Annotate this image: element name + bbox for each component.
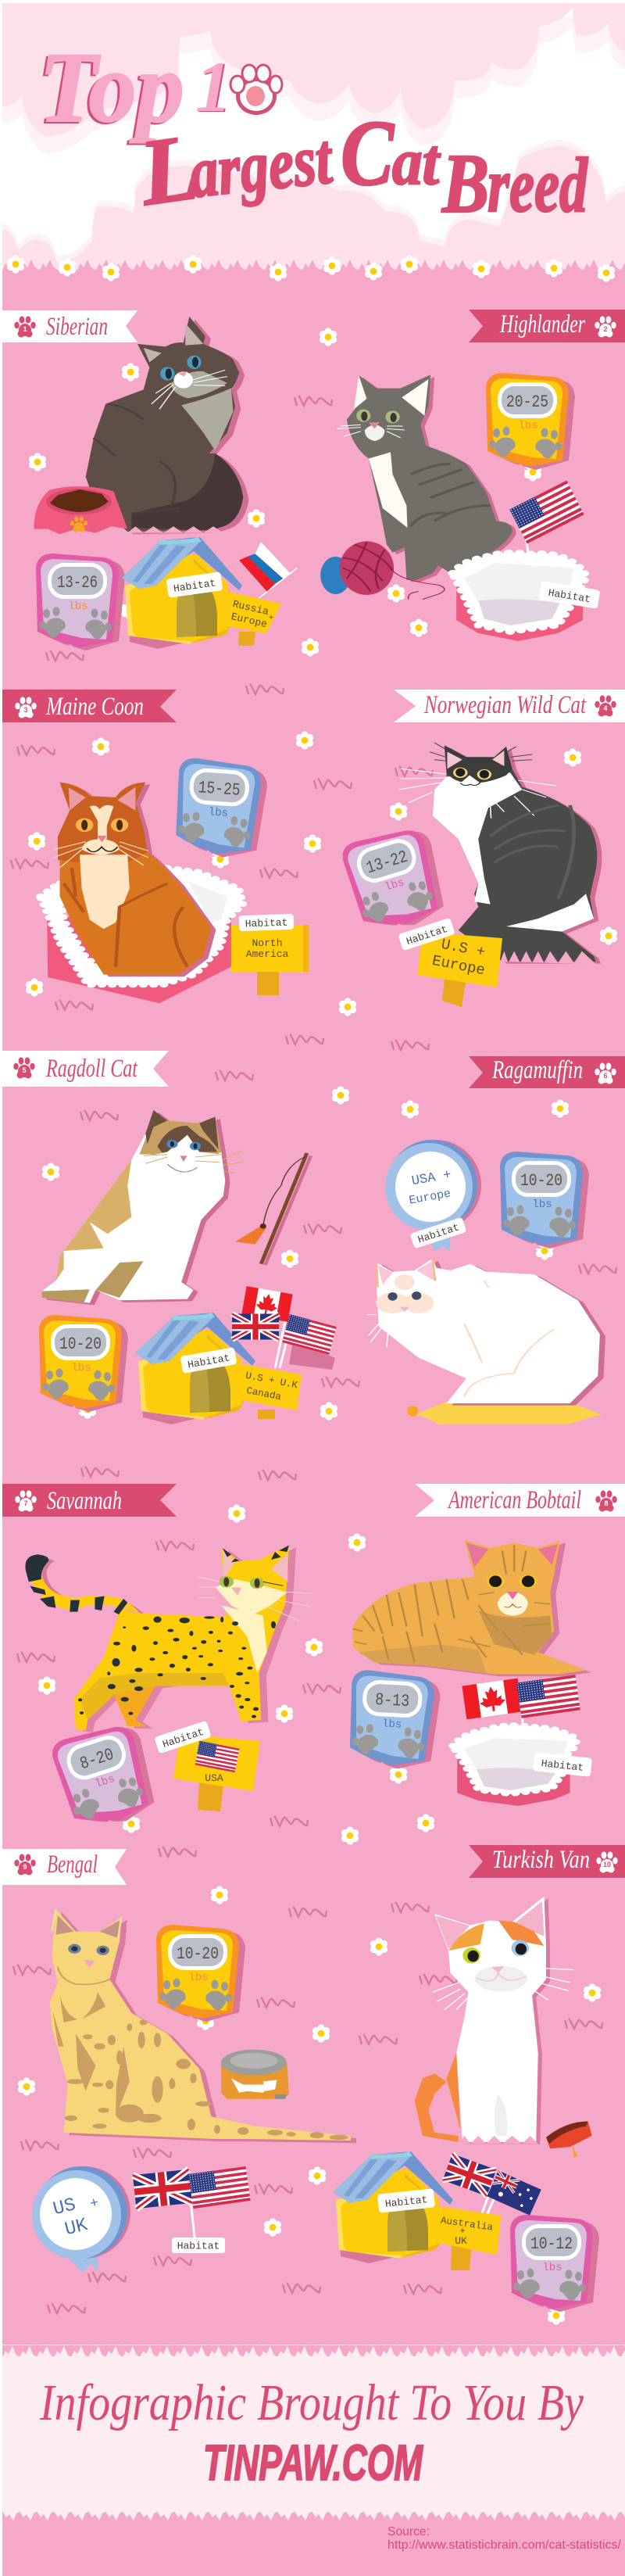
source note (388, 2525, 622, 2552)
cat: American Bobtail (353, 1540, 591, 1676)
flag: Russia (239, 542, 297, 598)
label: Habitat: Habitat (245, 917, 288, 930)
panel: header sky with clouds (2, 3, 625, 278)
weight scale: Ragdoll 10-20 lbs: 10-20 (59, 1335, 102, 1354)
label: Habitat: Habitat (384, 2194, 428, 2210)
ribbon badge: US + UK: + (88, 2195, 101, 2212)
weight scale: Ragdoll 10-20 lbs: lbs (71, 1362, 91, 1374)
sign: North America (231, 925, 309, 995)
weight scale: American Bobtail 8-13 lbs: 8-13 (375, 1690, 410, 1711)
cat: Highlander (337, 374, 516, 582)
house: Ragdoll habitat (135, 1313, 255, 1424)
banner: 5 Ragdoll Cat: 5 (22, 1066, 27, 1074)
title: argest (185, 118, 337, 213)
bed: Highlander habitat (452, 553, 586, 641)
banner: 4 Norwegian Wild Cat: 4 (603, 704, 608, 712)
weight scale: Bengal 10-20 lbs: 10-20 (177, 1944, 219, 1964)
weight scale: Savannah 8-20 lbs: lbs (94, 1773, 116, 1791)
sign: Australia + UK: + (459, 2226, 466, 2237)
sign: U.S + Europe: U.S + (440, 936, 487, 961)
weight scale: Norwegian Wild Cat 13-22 lbs (338, 821, 452, 940)
weight scale: Bengal 10-20 lbs (155, 1925, 245, 2022)
banner: 1 Siberian: 1 (23, 325, 27, 333)
title: B (441, 138, 489, 231)
cat: Savannah (25, 1546, 311, 1732)
sign: Russia + Europe: Europe (230, 611, 268, 630)
weight scale: Ragamuffin 10-20 lbs: lbs (532, 1198, 552, 1211)
flag: USA (509, 480, 584, 557)
banner: 10 Turkish Van (469, 1845, 625, 1878)
grass tufts (11, 396, 616, 2313)
title: Top (37, 34, 182, 145)
cat: Norwegian Wild Cat (398, 743, 602, 964)
weight scale: Savannah 8-20 lbs: 8-20 (77, 1745, 116, 1774)
cat collar (546, 2122, 592, 2158)
cat: Ragdoll (42, 1110, 243, 1305)
label: Habitat (172, 2237, 225, 2253)
label: Habitat (180, 1347, 237, 1374)
banner: 3 Maine Coon (2, 690, 177, 722)
ribbon badge: US + UK (32, 2166, 130, 2273)
sign: Australia + UK (434, 2206, 501, 2270)
title: 1 (195, 47, 231, 127)
title: C (341, 101, 395, 205)
panel: footer band (2, 2345, 625, 2520)
banner: 1 Siberian (2, 310, 138, 342)
sign: U.S + Europe (417, 932, 502, 1007)
banner: 7 Savannah (2, 1484, 177, 1517)
sign: North America: America (246, 948, 289, 960)
title (37, 32, 588, 231)
banner: 3 Maine Coon: 3 (23, 706, 28, 714)
label: Habitat (377, 2188, 435, 2213)
banner: 5 Ragdoll Cat (2, 1051, 169, 1087)
flowers scattered across the page (7, 255, 617, 2325)
cat food can (221, 2050, 289, 2099)
banner: 9 Bengal: Bengal (47, 1850, 98, 1879)
sign: USA: USA (205, 1772, 223, 1784)
cat: Ragamuffin (366, 1259, 605, 1406)
label: Habitat (398, 918, 455, 951)
flag: Australia (487, 2170, 541, 2216)
bed: American Bobtail habitat (452, 1725, 577, 1806)
banner: 9 Bengal: 9 (23, 1863, 27, 1871)
label: Habitat (154, 1721, 212, 1754)
sign: U.S + U.K Canada: U.S + U.K (245, 1370, 299, 1391)
weight scale: Siberian 13-26 lbs: lbs (68, 600, 88, 613)
title: 1 (197, 48, 233, 127)
banner: 6 Ragamuffin: Ragamuffin (491, 1056, 583, 1084)
weight scale: Highlander 20-25 lbs: 20-25 (506, 392, 548, 412)
weight scale: Maine Coon 15-25 lbs (172, 757, 269, 860)
sign: Russia + Europe: + (269, 614, 273, 623)
cat: Maine Coon (54, 783, 216, 976)
title: Top (39, 32, 184, 143)
flags: UK and USA (133, 2166, 251, 2244)
weight scale: Maine Coon 15-25 lbs: 15-25 (198, 778, 241, 801)
ribbon badge: USA + Europe (385, 1140, 481, 1251)
icon: paw zero (230, 65, 282, 115)
weight scale: Siberian 13-26 lbs: 13-26 (57, 573, 98, 593)
weight scale: Ragamuffin 10-20 lbs: 10-20 (520, 1171, 562, 1191)
weight scale: Highlander 20-25 lbs: lbs (518, 420, 538, 432)
banner: 7 Savannah: Savannah (47, 1487, 122, 1515)
flags: Canada and USA (462, 1675, 580, 1739)
banner: 2 Highlander: Highlander (499, 310, 585, 339)
cat: Bengal (50, 1909, 356, 2143)
banner: 5 Ragdoll Cat: Ragdoll Cat (45, 1055, 138, 1083)
banner: 2 Highlander: 2 (603, 325, 608, 333)
ribbon badge: US + UK: UK (62, 2215, 90, 2241)
toy: feather wand (235, 1153, 311, 1265)
cat: Turkish Van (415, 1897, 592, 2158)
flags: Canada, UK, USA (232, 1286, 337, 1370)
weight scale: Highlander 20-25 lbs (484, 373, 575, 470)
banner: 7 Savannah: 7 (23, 1499, 28, 1507)
label: Habitat: Habitat (177, 2241, 220, 2252)
sign: USA (173, 1734, 260, 1811)
sign: Russia + Europe (223, 592, 281, 646)
label: Habitat: Habitat (187, 1352, 230, 1371)
brand: TINPAW.COM: TINPAW.COM (203, 2434, 423, 2491)
source note: http://www.statisticbrain.com/cat-statistics/ (388, 2538, 622, 2552)
label: Habitat: Habitat (548, 587, 591, 605)
sign: Australia + UK: Australia (440, 2215, 494, 2234)
label: Habitat (410, 1217, 466, 1249)
title: L (133, 114, 205, 225)
label: Habitat: Habitat (405, 923, 449, 948)
weight scale: Turkish Van 10-12 lbs: lbs (542, 2262, 562, 2274)
label: Habitat (239, 914, 294, 931)
food bowl (34, 486, 127, 534)
title: at (392, 126, 441, 199)
banner: 3 Maine Coon: Maine Coon (45, 693, 144, 721)
yarn balls (320, 541, 445, 600)
banner: 2 Highlander (469, 310, 625, 342)
title: reed (488, 142, 588, 228)
weight scale: Turkish Van 10-12 lbs: 10-12 (530, 2234, 573, 2254)
weight scale: Ragdoll 10-20 lbs (38, 1315, 128, 1412)
banner: 9 Bengal (2, 1849, 127, 1885)
weight scale: Savannah 8-20 lbs (47, 1717, 163, 1837)
label: Habitat: Habitat (416, 1221, 461, 1246)
weight scale: American Bobtail 8-13 lbs (346, 1669, 441, 1771)
weight scale: Norwegian Wild Cat 13-22 lbs: lbs (384, 876, 406, 894)
banner: 1 Siberian: Siberian (46, 313, 108, 341)
label: Habitat (166, 571, 223, 598)
weight scale: Siberian 13-26 lbs (34, 554, 125, 650)
flags: UK and Australia (443, 2154, 541, 2217)
cushion: Ragamuffin (407, 1401, 602, 1424)
label: Habitat (533, 1752, 592, 1777)
sign: U.S + Europe: Europe (430, 952, 487, 979)
weight scale: Ragamuffin 10-20 lbs (498, 1152, 589, 1249)
banner: 10 Turkish Van: Turkish Van (492, 1846, 590, 1874)
banner: 6 Ragamuffin: 6 (603, 1072, 608, 1080)
sign: Russia + Europe: Russia (231, 598, 270, 618)
sign: North America: North (252, 937, 283, 949)
banner: 6 Ragamuffin (469, 1056, 625, 1088)
house: Siberian habitat (122, 537, 242, 649)
banner: 8 American Bobtail: 8 (604, 1499, 609, 1507)
label: Habitat: Habitat (541, 1757, 584, 1774)
ribbon badge: USA + Europe: USA + (411, 1168, 452, 1189)
weight scale: Bengal 10-20 lbs: lbs (188, 1972, 209, 1984)
weight scale: Maine Coon 15-25 lbs: lbs (208, 806, 229, 820)
sign: Australia + UK: UK (455, 2235, 467, 2247)
ribbon badge: USA + Europe: Europe (408, 1187, 452, 1208)
label: Habitat: Habitat (161, 1726, 205, 1750)
sign: U.S + U.K Canada (238, 1364, 302, 1419)
flag: USA (195, 1741, 239, 1772)
weight scale: American Bobtail 8-13 lbs: lbs (382, 1718, 402, 1732)
weight scale: Norwegian Wild Cat 13-22 lbs: 13-22 (364, 847, 410, 878)
weight scale: Turkish Van 10-12 lbs (509, 2215, 599, 2312)
house: Turkish Van habitat (333, 2151, 453, 2263)
banner: 10 Turkish Van: 10 (603, 1861, 611, 1868)
source note: Source: (388, 2525, 430, 2538)
label: Habitat (539, 581, 600, 609)
sign: U.S + U.K Canada: Canada (245, 1385, 282, 1403)
ribbon badge: US + UK: US (51, 2194, 78, 2220)
label: Habitat: Habitat (173, 577, 216, 595)
cat: Siberian (34, 317, 248, 534)
bed: Maine Coon (40, 868, 243, 1003)
